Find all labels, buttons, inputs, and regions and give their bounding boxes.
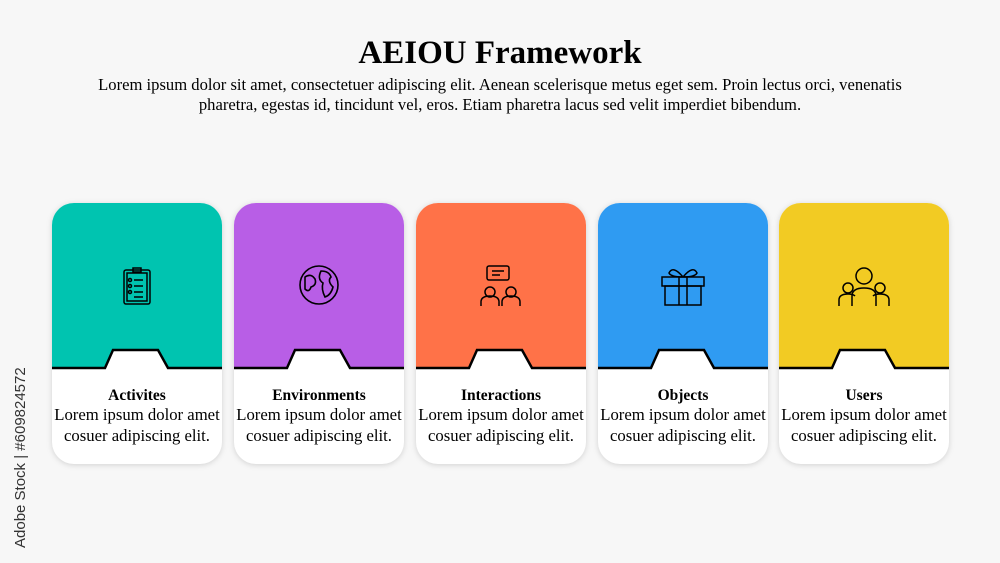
label: Objects (658, 387, 708, 404)
card: Users (777, 202, 951, 467)
card: Activites (50, 202, 224, 467)
text (781, 405, 947, 445)
label: Activites (108, 387, 166, 404)
text (418, 405, 584, 445)
text: Lorem ipsum dolor amet (418, 405, 584, 424)
text (600, 405, 766, 445)
label: Environments (272, 387, 366, 404)
text: cosuer adipiscing elit. (791, 426, 937, 445)
text: Lorem ipsum dolor amet (236, 405, 402, 424)
label: Interactions (461, 387, 541, 404)
label: Users (845, 387, 883, 404)
text: Lorem ipsum dolor amet (54, 405, 220, 424)
text (54, 405, 220, 445)
subtitle: pharetra, egestas id, tincidunt vel, eros. Etiam pharetra lacus sed velit imperdiet bibendum. (199, 95, 801, 114)
text: Lorem ipsum dolor amet (600, 405, 766, 424)
card: Objects (596, 202, 770, 467)
card: Interactions (414, 202, 588, 467)
title: AEIOU Framework (358, 35, 642, 71)
text (236, 405, 402, 445)
text: cosuer adipiscing elit. (428, 426, 574, 445)
subtitle: Lorem ipsum dolor sit amet, consectetuer adipiscing elit. Aenean scelerisque metus eget sem. Proin lectus orci, venenatis (98, 75, 902, 94)
side watermark text: Adobe Stock | #609824572 (12, 367, 29, 548)
text: cosuer adipiscing elit. (246, 426, 392, 445)
text: Lorem ipsum dolor amet (781, 405, 947, 424)
card: Environments (232, 202, 406, 467)
text: cosuer adipiscing elit. (64, 426, 210, 445)
subtitle (98, 75, 902, 114)
text: cosuer adipiscing elit. (610, 426, 756, 445)
